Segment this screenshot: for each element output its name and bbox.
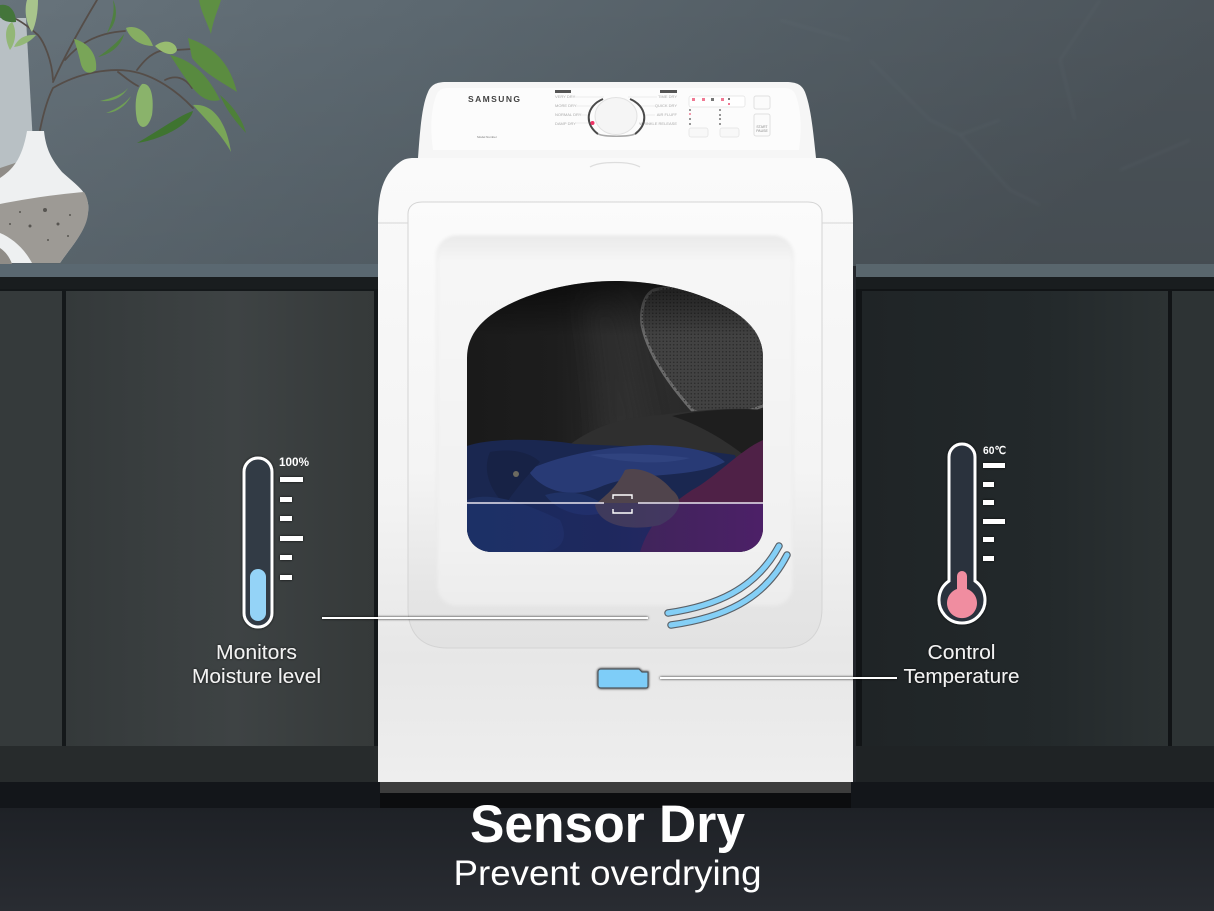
dial: [589, 98, 644, 136]
left cycle labels: MORE DRY: [555, 103, 577, 108]
power button: [754, 96, 770, 109]
moisture gauge: [244, 457, 309, 627]
countertop: [0, 264, 1214, 291]
back vase: [0, 18, 34, 182]
left cycle labels: [555, 90, 604, 126]
right cycle labels: WRINKLE RELEASE: [639, 121, 677, 126]
gauge fill: [250, 569, 266, 621]
left cycle labels: VERY DRY: [555, 94, 576, 99]
door window: [467, 281, 765, 553]
left cycle labels: DAMP DRY: [555, 121, 576, 126]
start pause button: [754, 114, 770, 136]
thermometer maximum: 60℃: [983, 445, 1006, 457]
gauge tube: [244, 458, 272, 627]
connector: moisture: [322, 617, 648, 619]
right cabinets: [856, 289, 1214, 749]
icon: temperature sensor: [598, 669, 648, 688]
subtitle: Prevent overdrying: [454, 854, 762, 893]
tinted measurement zone: [467, 503, 763, 553]
background wall: [0, 0, 1214, 266]
temperature label: Control: [928, 642, 996, 664]
thermometer mercury: [947, 571, 977, 618]
right cycle labels: TIME DRY: [658, 94, 677, 99]
drum rear vent: [642, 288, 765, 415]
laundry: [467, 409, 763, 552]
title: Sensor Dry: [470, 795, 746, 854]
temperature label: [904, 642, 1020, 688]
measurement line: [467, 495, 763, 513]
right cycle labels: QUICK DRY: [655, 103, 677, 108]
thermometer ticks: [983, 463, 1005, 561]
plinth: [0, 746, 1214, 809]
temperature label: Temperature: [904, 666, 1020, 688]
plant branches: [16, 0, 193, 130]
gauge ticks: [280, 477, 303, 580]
brand name: SAMSUNG: [468, 94, 520, 104]
gauge maximum: 100%: [279, 457, 309, 469]
indicator panel: [689, 96, 745, 137]
moisture label: [192, 642, 321, 688]
left cabinets: [0, 289, 378, 749]
floor: [0, 808, 1214, 911]
dryer base: [380, 780, 851, 808]
thermometer: [939, 444, 1006, 623]
start pause button: PAUSE: [756, 129, 768, 133]
plant leaves: [0, 0, 246, 152]
model label: Model Number: [477, 135, 497, 139]
right cycle labels: [628, 90, 678, 126]
thermometer outline: [939, 444, 985, 623]
start pause button: START: [756, 125, 768, 129]
right cycle labels: AIR FLUFF: [657, 112, 678, 117]
moisture label: Monitors: [216, 642, 297, 664]
cabinet body: [378, 158, 853, 782]
dryer: [322, 82, 897, 808]
left cycle labels: NORMAL DRY: [555, 112, 582, 117]
door: [408, 202, 822, 648]
vase: [0, 131, 88, 264]
icon: drum sensor bars: [668, 546, 787, 625]
control console: [418, 82, 816, 158]
moisture label: Moisture level: [192, 666, 321, 688]
connector: temperature: [660, 677, 897, 679]
